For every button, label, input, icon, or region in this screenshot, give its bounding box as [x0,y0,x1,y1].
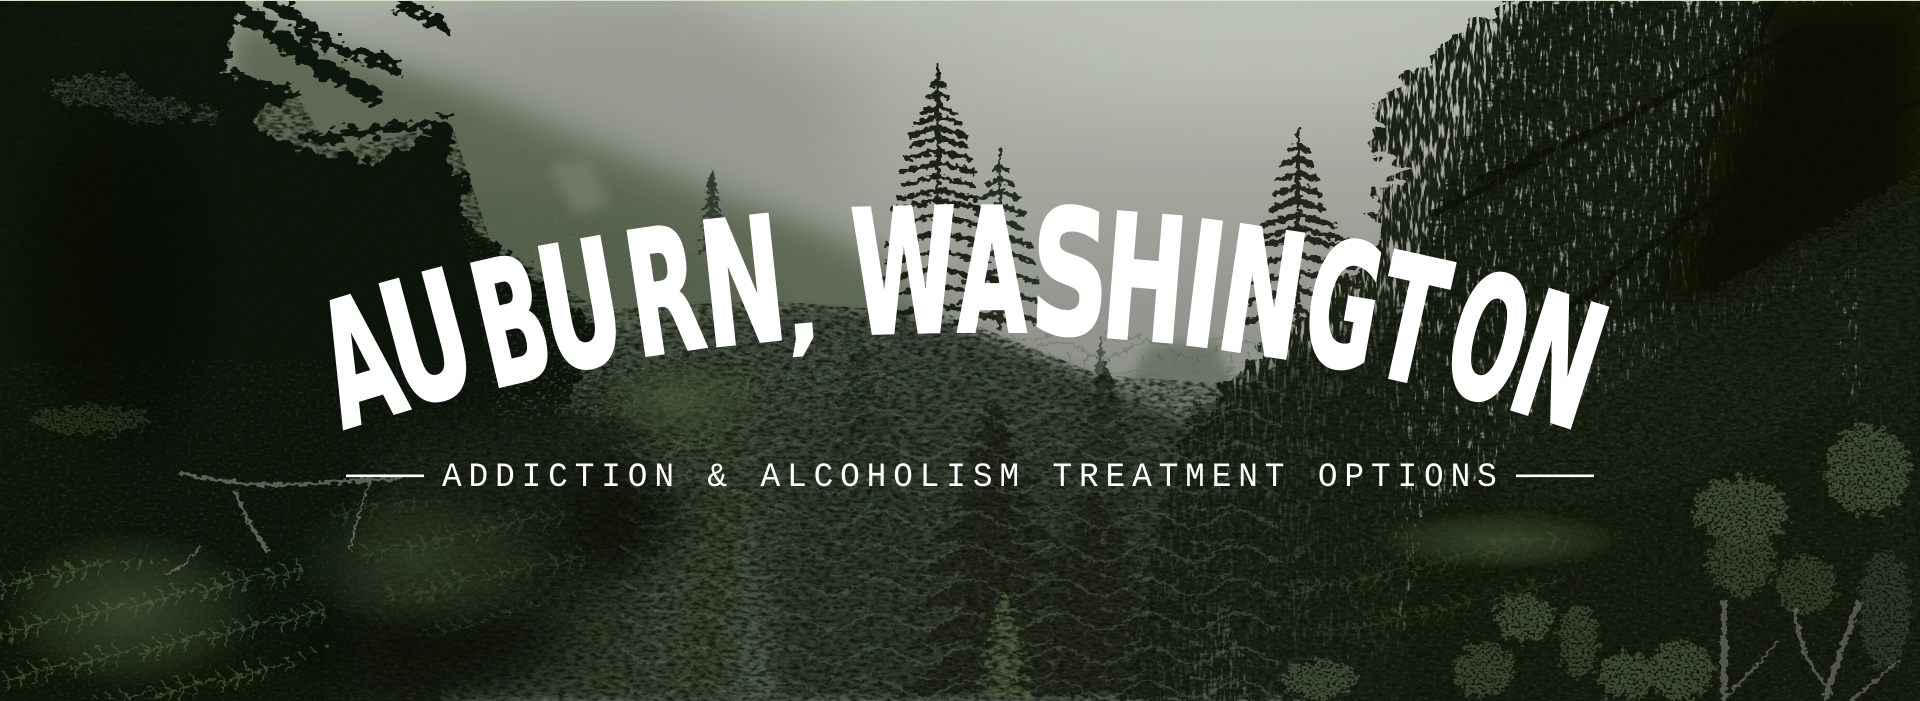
title: Auburn, Washington: S [1028,173,1112,375]
hillside in fog [200,0,950,440]
right spruce [1228,128,1380,340]
title: Auburn, Washington: , [778,248,826,368]
title: Auburn, Washington: U [525,202,637,412]
left deep shadow and lit boughs [0,60,760,701]
misty fir [1071,335,1130,625]
title: Auburn, Washington: A [958,174,1026,372]
title: Auburn, Washington: H [1096,178,1193,383]
forest fir trees [494,330,1336,700]
title: Auburn, Washington: U [363,235,493,448]
title: Auburn, Washington: R [614,189,714,397]
title: Auburn, Washington: O [1427,235,1549,446]
title: Auburn, Washington: N [692,180,794,387]
title: Auburn, Washington: G [1291,204,1396,412]
title: Auburn, Washington: B [456,219,568,428]
right foreground tree [1120,0,1920,701]
second spruce [950,150,1050,330]
title: Auburn, Washington: N [1491,255,1626,469]
small hillside fir [697,168,727,255]
title: Auburn, Washington [297,171,1626,469]
title: Auburn, Washington: A [297,257,423,468]
title: Auburn, Washington: W [849,171,960,374]
skyline spruce trees [697,65,1380,625]
title: Auburn, Washington: N [1208,190,1318,399]
right lit pine tufts and trunks [1260,426,1911,701]
title: Auburn, Washington: I [1173,187,1235,388]
tall spruce [872,65,1004,330]
subtitle with side rules: ADDICTION & ALCOHOLISM TREATMENT OPTIONS [442,458,1504,497]
title: Auburn, Washington: T [1358,218,1463,426]
top edge line [0,0,1920,1]
forest base and foggy slope [0,300,1400,701]
left foreground tree [0,0,680,701]
